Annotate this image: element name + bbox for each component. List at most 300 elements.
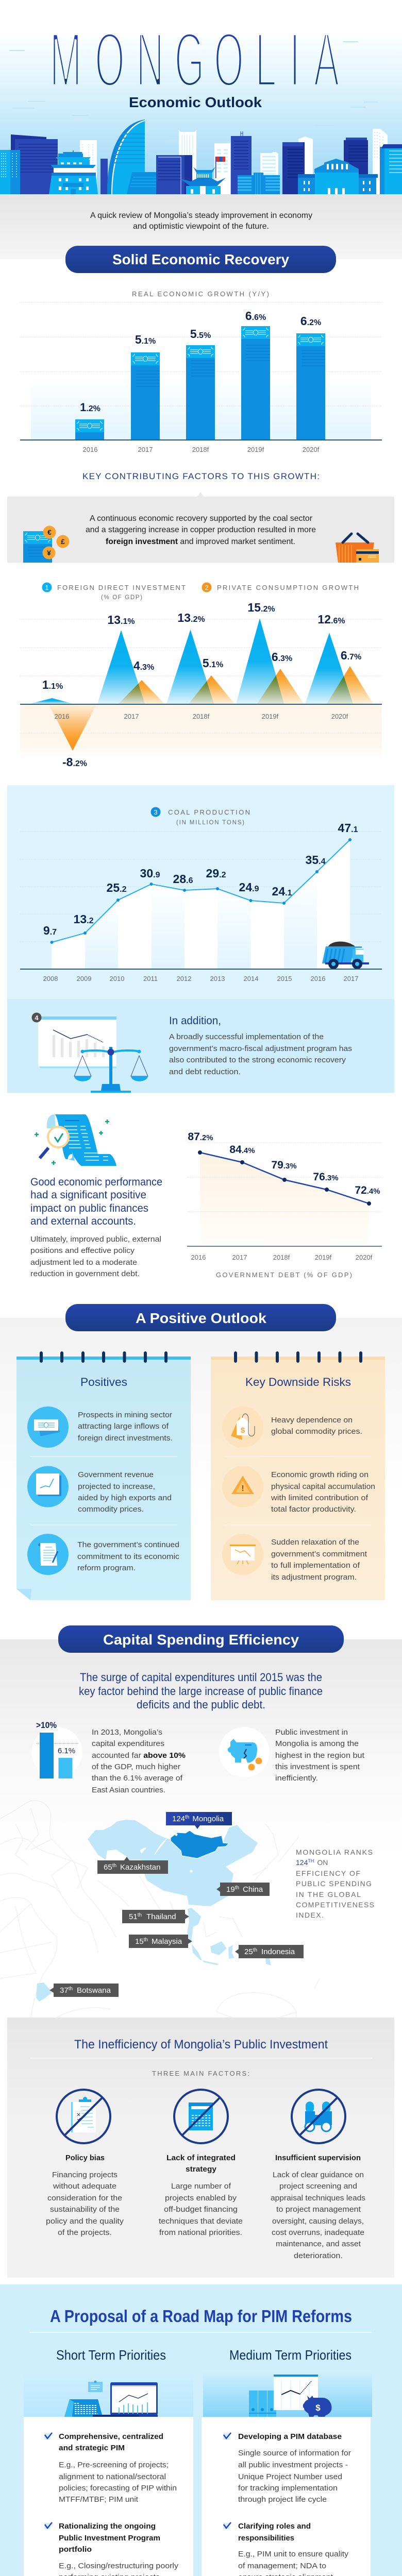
subtitle: Economic Outlook	[129, 94, 262, 110]
text: public investment: Public investment in	[275, 1728, 348, 1737]
title: MONGOLIA	[49, 17, 340, 103]
year labels	[43, 975, 358, 982]
performance text: positions and effective policy	[30, 1246, 135, 1255]
debt values: 76.3%	[313, 1171, 339, 1183]
year labels: 2016	[311, 975, 325, 982]
callout: Kazakhstan 65th: th	[112, 1863, 116, 1869]
item: roles and responsibilities: Clarifying roles and	[238, 2522, 311, 2531]
illustration: medium term: $	[315, 2403, 321, 2413]
negative 2016 triangle	[49, 705, 96, 751]
in addition text: government’s macro-fiscal adjustment program has	[169, 1044, 352, 1053]
debt values: 79.3%	[271, 1159, 297, 1171]
in addition text	[169, 1032, 352, 1076]
list card: medium term	[202, 2417, 371, 2576]
caspian and borders	[140, 1838, 167, 1855]
factor: policy bias: consideration for the	[47, 2194, 122, 2202]
chart heading: 3	[154, 808, 158, 816]
legend 1: foreign direct investment	[42, 582, 186, 601]
flag	[215, 157, 225, 178]
factor: policy bias: sustainability of the	[50, 2205, 120, 2214]
Botswana	[36, 1982, 52, 2002]
item: commodity prices	[222, 1406, 362, 1448]
item: PIM database	[223, 2432, 351, 2504]
coal values: 9.7	[43, 924, 57, 937]
bar 2016: 1.2%	[80, 401, 100, 414]
factor: lack of integrated strategy: off-budget financing	[164, 2205, 238, 2214]
coal values: 24.1	[272, 885, 292, 898]
text: public investment: Mongolia is among the	[275, 1739, 359, 1748]
bar 2018f	[186, 327, 215, 440]
factor: insufficient supervision: maintenance, and asset	[276, 2240, 361, 2248]
callout: Thailand 51st: 51	[129, 1912, 138, 1921]
factor: lack of integrated strategy: strategy	[186, 2165, 217, 2174]
item: comprehensive PIM: policies; forecasting of PIP within	[59, 2484, 177, 2493]
chart: FDI and private consumption	[20, 582, 382, 769]
heading: key contributing factors: KEY CONTRIBUTING FACTORS TO THIS GROWTH:	[82, 471, 320, 481]
clouds	[9, 41, 378, 141]
year labels: 2013	[210, 975, 225, 982]
item: PIM database: Single source of information for	[238, 2449, 351, 2458]
building: navy right 2	[344, 138, 368, 176]
capital spending lead text	[79, 1671, 323, 1711]
item: mining prospects	[27, 1406, 173, 1448]
item: comprehensive PIM: E.g., Pre-screening of projects;	[59, 2461, 169, 2469]
item: PIM database: Developing a PIM database	[238, 2432, 342, 2441]
performance text	[30, 1235, 161, 1278]
year labels: 2017	[344, 975, 358, 982]
item: reform commitment: The government’s continued	[77, 1540, 179, 1549]
text: capital expenditures: of the GDP, much higher	[92, 1762, 180, 1771]
list card: short term	[24, 2417, 193, 2576]
item: reform commitment: commitment to its economic	[77, 1552, 180, 1561]
callout: Botswana 37th: Botswana	[77, 1986, 111, 1995]
text: Mongolia ranks: 124	[296, 1858, 308, 1867]
year labels: 2012	[177, 975, 191, 982]
factor: lack of integrated strategy: Large number of	[171, 2182, 231, 2191]
year labels: 2019f	[262, 713, 279, 720]
icon: calculator	[189, 2103, 213, 2130]
item: relaxed commitment: government’s commitment	[271, 1550, 367, 1558]
government palace	[298, 159, 378, 194]
item: capital accumulation: with limited contribution of	[271, 1494, 368, 1502]
icon: banknote and coins	[23, 526, 69, 563]
icon: document with magnifier	[35, 1114, 116, 1166]
item: mining prospects: Prospects in mining sector	[78, 1411, 172, 1419]
icon: balance scale	[74, 1047, 148, 1093]
coal values: 13.2	[74, 912, 94, 926]
binder rings	[236, 1353, 361, 1361]
legend 2: private consumption growth: PRIVATE CONSUMPTION GROWTH	[217, 584, 359, 591]
in addition heading: In addition,	[169, 1015, 221, 1027]
heading: Key Downside Risks	[245, 1376, 351, 1388]
item: relaxed commitment: its adjustment program.	[271, 1573, 357, 1582]
bar 2017: 5.1%	[135, 333, 156, 346]
value labels: 6.3%	[272, 650, 292, 664]
text: Mongolia ranks: TH	[308, 1858, 314, 1863]
text: capital expenditures: In 2013, Mongolia’s	[92, 1728, 162, 1737]
icon: cracked piggy bank	[219, 1727, 270, 1777]
banner: Capital Spending Efficiency: Capital Spending Efficiency	[103, 1632, 299, 1648]
callout: Indonesia 25th: Indonesia	[261, 1947, 295, 1956]
performance heading: Good economic performance	[30, 1176, 162, 1188]
factor: policy bias	[46, 2090, 124, 2237]
bar 2020f: 6.2%	[300, 314, 321, 328]
bar 2018f: 5.5%	[190, 327, 211, 341]
factor: insufficient supervision: deterioration.	[294, 2251, 343, 2260]
year labels: 2016	[55, 713, 69, 720]
factor: lack of integrated strategy: from national priorities.	[159, 2228, 242, 2237]
area columns	[52, 840, 350, 969]
value labels: 13.1%	[107, 613, 135, 626]
item: rationalizing PIP: Rationalizing the ongoing	[59, 2522, 156, 2531]
item: relaxed commitment: Sudden relaxation of the	[271, 1538, 359, 1547]
factor: insufficient supervision: project screening and	[279, 2182, 357, 2191]
text: public investment: highest in the region but	[275, 1751, 365, 1760]
column heading: medium term: Medium Term Priorities	[229, 2347, 351, 2363]
panel: key downside risks	[211, 1353, 385, 1600]
item: capital accumulation: physical capital accumulation	[271, 1482, 375, 1491]
capital spending lead text: key factor behind the large increase of public finance	[79, 1685, 323, 1698]
bar 2019f	[241, 309, 270, 440]
illustration: short term	[24, 2371, 193, 2417]
item: mining prospects: foreign direct investments.	[78, 1434, 173, 1443]
capital section background	[0, 1639, 402, 1856]
coal values: 47.1	[338, 821, 358, 835]
banner: Capital Spending Efficiency	[58, 1625, 344, 1653]
stat: capital expenditure bars	[32, 1720, 82, 1778]
callout: Botswana 37th	[49, 1984, 119, 1997]
legend 1: foreign direct investment: (% OF GDP)	[101, 595, 142, 601]
item: government revenue: Government revenue	[78, 1470, 154, 1479]
text: Mongolia ranks: INDEX.	[296, 1911, 324, 1919]
year labels: 2018f	[192, 446, 209, 453]
callout: Mongolia 124th: 124	[172, 1815, 185, 1823]
coal values: 29.2	[206, 867, 226, 880]
text: Mongolia ranks: ON	[317, 1858, 328, 1867]
summary text	[86, 514, 316, 546]
factor: policy bias: Financing projects	[52, 2171, 118, 2179]
callout: Thailand 51st	[122, 1910, 189, 1923]
callout: Thailand 51st: Thailand	[146, 1912, 176, 1921]
text: capital expenditures: than the 6.1% average of	[92, 1774, 183, 1783]
item: government revenue	[27, 1466, 172, 1514]
bar chart: real economic growth	[20, 290, 382, 453]
item: PIM database: through project life cycle	[238, 2495, 327, 2504]
building: blue far right	[380, 144, 402, 194]
item: commodity prices: $	[241, 1426, 245, 1435]
panel: key factors summary	[7, 492, 394, 563]
panel: inefficiency of public investment	[7, 2018, 394, 2278]
year labels: 2015	[277, 975, 292, 982]
callout: China 19th: 19	[226, 1885, 235, 1894]
performance heading: impact on public finances	[30, 1202, 148, 1214]
text: Mongolia ranks: COMPETITIVENESS	[296, 1901, 374, 1909]
banner: A Positive Outlook	[65, 1304, 336, 1331]
item: roles and responsibilities: responsibilities	[238, 2534, 294, 2543]
item: rationalizing PIP: E.g., Closing/restructuring poorly	[59, 2562, 179, 2570]
callout: China 19th: th	[235, 1885, 239, 1891]
Mongolia	[171, 1831, 229, 1858]
item: comprehensive PIM: Comprehensive, centralized	[59, 2432, 163, 2441]
item: comprehensive PIM: alignment to national/sectoral	[59, 2472, 166, 2481]
China and Kazakhstan region	[88, 1820, 258, 1906]
icon: shopping basket and card	[336, 534, 379, 563]
factor: insufficient supervision: Lack of clear guidance on	[273, 2171, 364, 2179]
item: government revenue: commodity prices.	[78, 1505, 144, 1514]
panel: coal production	[7, 785, 394, 999]
value labels: 12.6%	[317, 613, 345, 626]
heading: A Proposal of a Road Map for PIM Reforms	[50, 2307, 352, 2326]
capital spending lead text: The surge of capital expenditures until 2015 was the	[80, 1671, 322, 1684]
year labels: 2016	[191, 1253, 206, 1261]
FDI triangles	[30, 618, 353, 704]
outlook section background	[0, 1318, 402, 1493]
building: blue low block	[238, 173, 280, 194]
map outlines	[0, 1801, 320, 2018]
performance text: reduction in government debt.	[30, 1269, 140, 1278]
building: navy tower with antenna	[231, 131, 252, 194]
item: capital accumulation	[222, 1466, 375, 1514]
building: white right	[298, 137, 313, 178]
skyline illustration	[0, 120, 402, 194]
year labels: 2011	[143, 975, 158, 982]
building: far left blue	[0, 150, 20, 194]
badge 4: 4	[35, 1014, 39, 1022]
callout: Thailand 51st: th	[138, 1912, 142, 1918]
left palace	[49, 150, 98, 194]
panel: in addition	[7, 999, 394, 1093]
icon: banknote and coins: £	[61, 537, 65, 546]
callout: China 19th	[216, 1883, 270, 1896]
coal values	[43, 821, 358, 937]
text: public investment: this investment is spent	[275, 1762, 360, 1771]
performance text: adjustment led to a moderate	[30, 1258, 137, 1267]
factor: lack of integrated strategy: projects enabled by	[165, 2194, 237, 2202]
item: rationalizing PIP: Public Investment Program	[59, 2534, 160, 2543]
building: navy centre	[156, 155, 192, 194]
item: roles and responsibilities	[223, 2522, 349, 2576]
value labels: 6.7%	[341, 649, 361, 662]
year labels: 2016	[83, 446, 97, 453]
intro text: and optimistic viewpoint of the future.	[133, 222, 269, 231]
item: commodity prices: global commodity prices.	[271, 1427, 362, 1436]
item: government revenue: projected to increase,	[78, 1482, 155, 1491]
callout: Kazakhstan 65th	[97, 1857, 168, 1874]
item: relaxed commitment	[222, 1534, 367, 1582]
building: white flag tower	[214, 143, 230, 194]
item: PIM database: Unique Project Number used	[238, 2472, 342, 2481]
coal values: 30.9	[140, 867, 160, 880]
year labels: 2009	[77, 975, 91, 982]
callout: Kazakhstan 65th: 65	[104, 1863, 112, 1872]
text: Mongolia ranks: PUBLIC SPENDING	[296, 1879, 372, 1888]
building: left navy tower	[11, 134, 58, 194]
summary text: foreign investment and improved market sentiment.	[106, 537, 295, 546]
year labels: 2010	[110, 975, 124, 982]
factor: lack of integrated strategy	[159, 2090, 243, 2237]
value labels: 1.1%	[42, 678, 63, 691]
item: roles and responsibilities: E.g., PIM unit to ensure quality	[238, 2550, 349, 2558]
year labels: 2018f	[193, 713, 210, 720]
factor: lack of integrated strategy: Lack of integrated	[166, 2154, 236, 2162]
callout: Malaysia 15th: Malaysia	[152, 1937, 182, 1946]
item: government revenue: aided by high exports and	[78, 1494, 172, 1502]
item: PIM database: all public investment projects -	[238, 2461, 348, 2469]
factor: policy bias: policy and the quality	[46, 2217, 124, 2226]
item: capital accumulation: Economic growth riding on	[271, 1470, 368, 1479]
text: Mongolia ranks: IN THE GLOBAL	[296, 1890, 361, 1899]
performance heading: and external accounts.	[30, 1215, 136, 1227]
factor: policy bias: without adequate	[53, 2182, 116, 2191]
icon: presentation board	[38, 1016, 116, 1069]
factor: policy bias: Policy bias	[65, 2154, 105, 2162]
callout: Botswana 37th: th	[69, 1986, 73, 1992]
intro text	[90, 211, 312, 231]
icon: banknote and coins: ¥	[47, 549, 51, 557]
chart heading: (IN MILLION TONS)	[176, 820, 244, 826]
callout: Botswana 37th: 37	[60, 1986, 69, 1995]
callout: China 19th: China	[243, 1885, 263, 1894]
debt values: 72.4%	[355, 1184, 380, 1196]
year labels: 2008	[43, 975, 58, 982]
in addition text: and debt reduction.	[169, 1067, 241, 1076]
text: capital expenditures	[92, 1728, 186, 1794]
item: mining prospects: attracting large inflows of	[78, 1422, 169, 1431]
factor: insufficient supervision: to project management	[276, 2205, 361, 2214]
value labels	[42, 601, 361, 769]
curved tower	[100, 120, 158, 194]
bar 2017	[131, 333, 160, 440]
year labels: 2017	[124, 713, 139, 720]
bar 2019f: 6.6%	[245, 309, 266, 323]
callout: Indonesia 25th: th	[253, 1947, 257, 1953]
legend 2: private consumption growth: 2	[205, 584, 209, 591]
year labels: 2020f	[331, 713, 348, 720]
legend 1: foreign direct investment: FOREIGN DIRECT INVESTMENT	[57, 584, 186, 591]
heading: Positives	[80, 1376, 127, 1388]
header background	[0, 0, 402, 194]
item: comprehensive PIM	[44, 2432, 177, 2504]
callout: Indonesia 25th	[235, 1945, 304, 1958]
callout: Malaysia 15th	[129, 1935, 192, 1948]
year labels	[55, 713, 348, 720]
item: rationalizing PIP: portfolio	[59, 2545, 92, 2554]
text: public investment	[275, 1728, 365, 1783]
factor: insufficient supervision: oversight, causing delays,	[272, 2217, 364, 2226]
building: white centre tower	[179, 130, 196, 194]
chart title: REAL ECONOMIC GROWTH (Y/Y)	[132, 290, 269, 298]
factor: insufficient supervision: cost overruns, inadequate	[272, 2228, 364, 2237]
year labels: 2018f	[273, 1253, 290, 1261]
banner: Solid Economic Recovery: Solid Economic Recovery	[112, 251, 289, 267]
callout: Mongolia 124th: th	[185, 1815, 189, 1820]
icon: banknote and coins: €	[47, 528, 52, 536]
stat: capital expenditure bars: >10%	[36, 1720, 57, 1730]
binder rings	[41, 1353, 166, 1361]
text: Mongolia ranks: EFFICIENCY OF	[296, 1869, 360, 1877]
year labels: 2017	[138, 446, 153, 453]
year labels	[191, 1253, 373, 1261]
column heading: short term: Short Term Priorities	[56, 2347, 166, 2363]
world map	[0, 1801, 320, 2018]
debt values: 87.2%	[188, 1131, 213, 1143]
bar 2016	[75, 401, 104, 440]
factor: insufficient supervision: Insufficient supervision	[275, 2154, 361, 2162]
coal values: 28.6	[173, 872, 193, 886]
text: Mongolia ranks	[296, 1848, 374, 1919]
in addition text: also contributed to the strong economic recovery	[169, 1056, 346, 1064]
bar 2020f	[296, 314, 325, 440]
capital spending lead text: deficits and the public debt.	[137, 1698, 265, 1711]
summary text: A continuous economic recovery supported by the coal sector	[90, 514, 313, 523]
item: comprehensive PIM: MTFF/MTBF; PIM unit	[59, 2495, 139, 2504]
year labels: 2019f	[315, 1253, 332, 1261]
banner: Solid Economic Recovery	[65, 246, 336, 273]
callout: Malaysia 15th: 15	[135, 1937, 144, 1946]
coal values: 24.9	[239, 880, 259, 894]
item: reform commitment	[27, 1534, 180, 1575]
icon: binoculars	[305, 2102, 332, 2131]
southeast Asia countries	[187, 1908, 271, 1965]
panel: positives	[16, 1353, 191, 1600]
text: Mongolia ranks: MONGOLIA RANKS	[296, 1848, 373, 1856]
item: relaxed commitment: to full implementation of	[271, 1561, 360, 1570]
building: white low block	[260, 152, 278, 178]
stat: capital expenditure bars: 6.1%	[58, 1747, 75, 1755]
icon: coal truck	[322, 942, 369, 969]
intro text: A quick review of Mongolia’s steady improvement in economy	[90, 211, 312, 220]
value labels: 13.2%	[177, 611, 205, 624]
intro band background	[0, 194, 402, 259]
callout: Malaysia 15th: th	[144, 1937, 148, 1943]
factor: lack of integrated strategy: techniques that deviate	[159, 2217, 243, 2226]
debt values: 84.4%	[229, 1144, 255, 1156]
year labels: 2019f	[247, 446, 264, 453]
callout: Mongolia 124th	[166, 1812, 232, 1829]
item: roles and responsibilities: of management; NDA to	[238, 2562, 326, 2570]
text: capital expenditures: East Asian countries.	[92, 1786, 165, 1794]
legend 1: foreign direct investment: 1	[45, 584, 49, 591]
chart caption: GOVERNMENT DEBT (% OF GDP)	[216, 1271, 352, 1279]
performance heading	[30, 1176, 162, 1227]
icon: clipboard	[71, 2097, 96, 2132]
callout: Kazakhstan 65th: Kazakhstan	[120, 1863, 160, 1872]
heading: The Inefficiency of Mongolia’s Public Investment	[74, 2038, 328, 2052]
value labels: 5.1%	[203, 656, 223, 670]
text: public investment: inefficiently.	[275, 1774, 318, 1783]
building: navy right 1	[282, 142, 305, 194]
factor: policy bias: of the projects.	[58, 2228, 112, 2237]
coal values: 25.2	[107, 881, 127, 894]
badge 4	[32, 1013, 41, 1022]
value labels: -8.2%	[62, 755, 87, 769]
item: reform commitment: reform program.	[77, 1564, 136, 1572]
performance text: Ultimately, improved public, external	[30, 1235, 161, 1244]
building: white far right	[373, 129, 388, 194]
item: capital accumulation: total factor productivity.	[271, 1505, 356, 1514]
text: capital expenditures: accounted far above 10%	[92, 1751, 186, 1760]
item: rationalizing PIP	[44, 2522, 179, 2576]
line chart: government debt	[187, 1131, 382, 1279]
callout: Indonesia 25th: 25	[244, 1947, 253, 1956]
chart heading: COAL PRODUCTION	[168, 808, 250, 816]
summary text: and a staggering increase in copper production resulted in more	[86, 526, 316, 534]
callout: Mongolia 124th: Mongolia	[192, 1815, 224, 1823]
building: white tower	[80, 140, 97, 194]
consumption triangles	[119, 666, 373, 704]
panel: road map	[0, 2284, 402, 2576]
debt values	[188, 1131, 380, 1196]
